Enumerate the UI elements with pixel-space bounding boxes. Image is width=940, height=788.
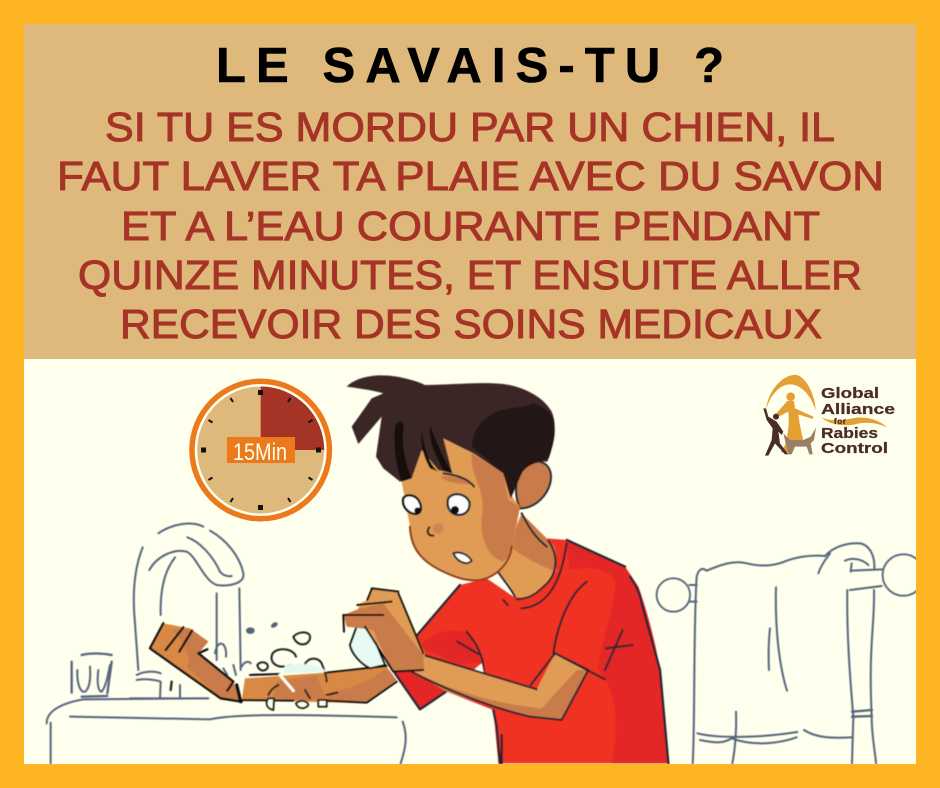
icon: Global Alliance for Rabies Control logo: Global	[821, 385, 879, 402]
forearm: lower arm and hand	[242, 667, 397, 703]
boy: hair	[347, 375, 555, 498]
boy: eyes	[403, 495, 421, 514]
forearm: wound arm	[150, 622, 235, 693]
text block: message: QUINZE MINUTES, ET ENSUITE ALLER	[78, 252, 862, 298]
illustration: faucet	[130, 524, 279, 698]
text block: message: FAUT LAVER TA PLAIE AVEC DU SAVON	[57, 153, 884, 199]
icon: Global Alliance for Rabies Control logo: for	[834, 417, 846, 426]
hand holding soap	[358, 588, 426, 658]
illustration: sink and glass	[47, 653, 406, 763]
boy: face	[400, 437, 520, 580]
boy: rear arm	[413, 654, 585, 709]
boy: mouth	[453, 553, 472, 563]
illustration: scene	[47, 375, 924, 763]
title: LE SAVAIS-TU ?	[216, 39, 724, 93]
icon: Global Alliance for Rabies Control logo: Rabies	[821, 425, 878, 442]
text block: message	[57, 104, 884, 347]
text block: message: ET A L’EAU COURANTE PENDANT	[121, 203, 820, 249]
icon: 15 minute clock	[189, 378, 332, 522]
panel: heading background	[24, 24, 916, 360]
icon: Global Alliance for Rabies Control logo: Alliance	[821, 401, 895, 418]
boy: neck	[497, 513, 556, 598]
icon: 15 minute clock: 15Min	[233, 439, 287, 466]
text block: message: SI TU ES MORDU PAR UN CHIEN, IL	[105, 104, 835, 150]
illustration: washing forearm and soap	[150, 588, 425, 710]
foam bubbles	[257, 632, 337, 710]
text block: message: RECEVOIR DES SOINS MEDICAUX	[120, 301, 822, 347]
boy: red t-shirt	[395, 538, 668, 763]
soap bottle	[350, 625, 385, 668]
panel: illustration background	[24, 359, 916, 764]
boy: ear	[516, 462, 551, 508]
illustration: boy	[347, 375, 668, 763]
illustration: towel on rail	[657, 543, 924, 763]
icon: Global Alliance for Rabies Control logo	[763, 375, 895, 457]
icon: Global Alliance for Rabies Control logo: Control	[821, 440, 888, 457]
